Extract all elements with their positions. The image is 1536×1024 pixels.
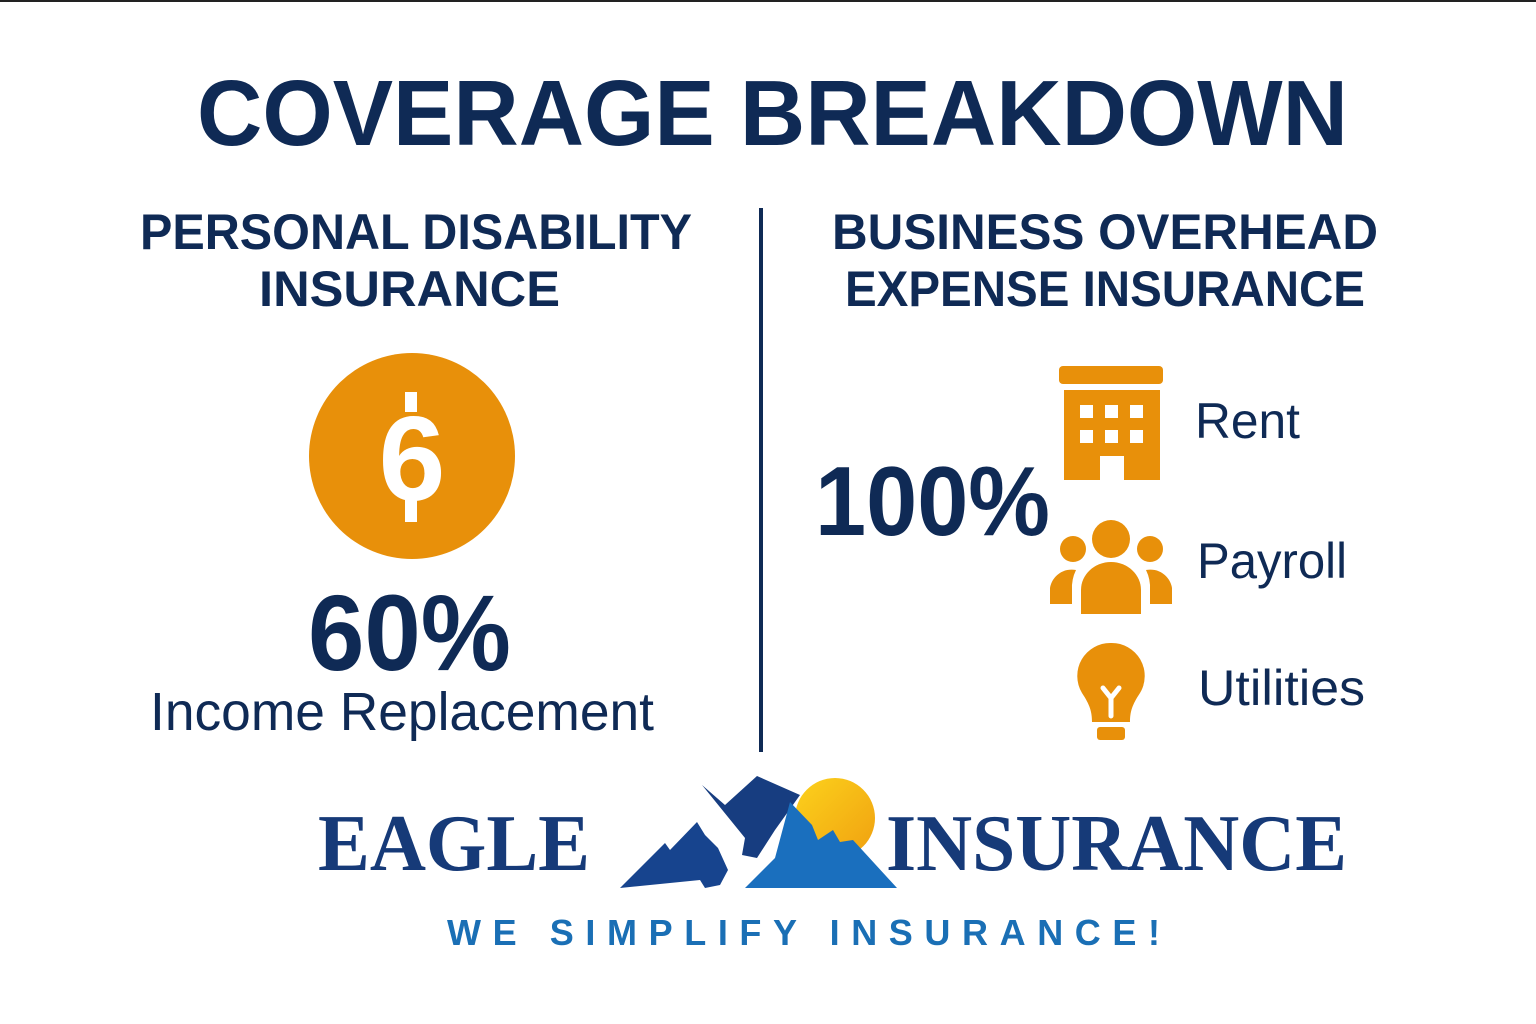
icon: people <box>1050 520 1172 614</box>
logo <box>318 776 1347 888</box>
icon: building <box>1059 366 1163 480</box>
title: COVERAGE BREAKDOWN <box>197 61 1348 165</box>
label: utilities: Utilities <box>1198 660 1365 716</box>
heading: personal disability insurance: PERSONAL DISABILITY <box>140 204 692 260</box>
icon: coin <box>309 353 515 559</box>
tagline: WE SIMPLIFY INSURANCE! <box>447 912 1160 953</box>
stat: 100%: 100% <box>815 446 1050 556</box>
heading: business overhead expense insurance <box>832 204 1378 317</box>
heading: business overhead expense insurance: EXPENSE INSURANCE <box>845 261 1365 317</box>
label: rent: Rent <box>1195 393 1300 449</box>
heading: personal disability insurance <box>140 204 692 317</box>
divider <box>759 208 763 752</box>
icon: light bulb <box>1077 643 1145 740</box>
heading: business overhead expense insurance: BUSINESS OVERHEAD <box>832 204 1378 260</box>
label: income replacement: Income Replacement <box>150 682 654 742</box>
icon: coin: 6 <box>379 392 445 526</box>
stat: 60%: 60% <box>308 572 511 693</box>
logo: INSURANCE <box>886 800 1347 888</box>
label: payroll: Payroll <box>1197 533 1347 589</box>
heading: personal disability insurance: INSURANCE <box>259 261 560 317</box>
logo: EAGLE <box>318 800 590 888</box>
